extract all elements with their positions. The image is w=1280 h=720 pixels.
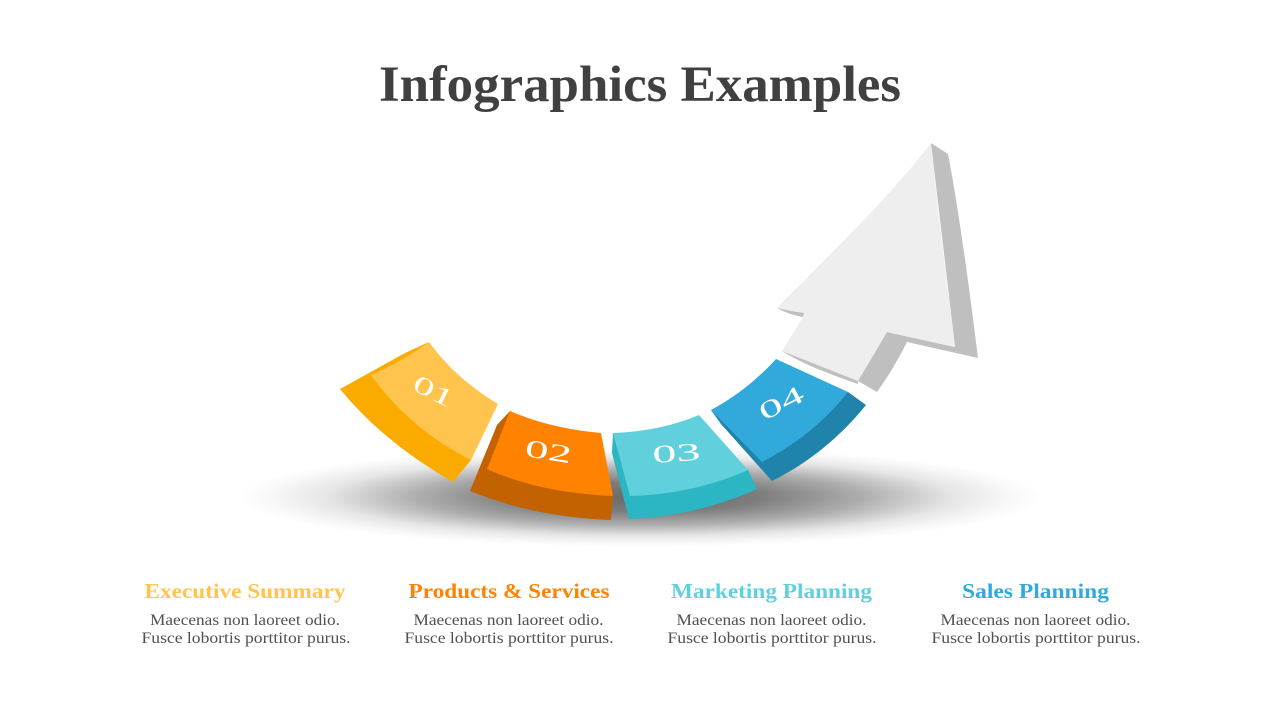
arrow head bbox=[777, 143, 978, 392]
segment 04 top bbox=[711, 359, 848, 462]
ground shadow bbox=[238, 447, 1042, 547]
segment 02 bbox=[470, 411, 613, 520]
segment 01 side bbox=[340, 342, 471, 482]
caption: Products & Services bbox=[404, 579, 614, 647]
title: Infographics Examples bbox=[379, 57, 901, 113]
caption: Executive Summary bbox=[142, 579, 350, 647]
segment 04 side bbox=[711, 392, 866, 481]
body text: Maecenas non laoreet odio. bbox=[414, 612, 604, 629]
segment 03 side bbox=[612, 433, 757, 519]
segment 01 top bbox=[371, 342, 498, 460]
heading: Executive Summary bbox=[144, 579, 346, 603]
arrow lower slivers bbox=[777, 308, 858, 384]
body text line 2: Fusce lobortis porttitor purus. bbox=[932, 630, 1140, 647]
heading: Marketing Planning bbox=[671, 579, 872, 603]
arrow side face bbox=[858, 143, 978, 392]
body text line 2: Fusce lobortis porttitor purus. bbox=[404, 630, 614, 647]
number 04: 04 bbox=[754, 381, 809, 426]
segment 01 bbox=[340, 342, 498, 482]
heading: Sales Planning bbox=[962, 579, 1109, 603]
heading: Products & Services bbox=[408, 579, 610, 603]
segment 03 bbox=[612, 415, 757, 519]
body text: Maecenas non laoreet odio. bbox=[676, 612, 866, 629]
body text line 2: Fusce lobortis porttitor purus. bbox=[668, 630, 876, 647]
body text line 2: Fusce lobortis porttitor purus. bbox=[142, 630, 350, 647]
number 02: 02 bbox=[523, 435, 574, 469]
caption: Sales Planning bbox=[932, 579, 1140, 647]
number 03: 03 bbox=[652, 439, 701, 469]
caption: Marketing Planning bbox=[668, 579, 876, 647]
number 01: 01 bbox=[408, 370, 458, 413]
segment 02 top bbox=[487, 411, 613, 496]
segment 03 top bbox=[613, 415, 748, 496]
arrow top face bbox=[777, 143, 955, 381]
segment 02 side bbox=[470, 411, 613, 520]
body text: Maecenas non laoreet odio. bbox=[940, 612, 1130, 629]
body text: Maecenas non laoreet odio. bbox=[150, 612, 340, 629]
segment 04 bbox=[711, 359, 866, 481]
